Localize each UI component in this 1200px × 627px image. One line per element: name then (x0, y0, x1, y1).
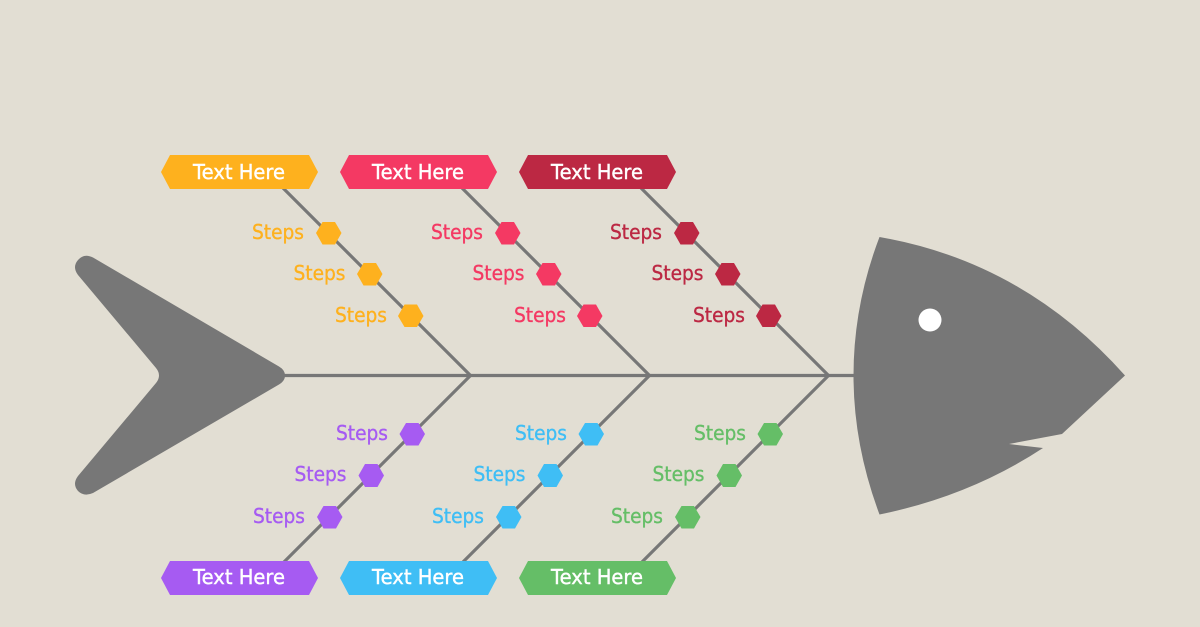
step 2 (474, 462, 563, 487)
step 3 (693, 303, 782, 327)
banner: orange (161, 155, 318, 189)
step 1: Steps (336, 421, 388, 445)
step 2 (652, 261, 740, 286)
branch: blue (340, 421, 604, 595)
step 1 (431, 220, 520, 244)
step 1: Steps (694, 421, 746, 445)
step 2: Steps (652, 462, 704, 486)
step 1: Steps (515, 421, 567, 445)
step 3 (253, 504, 342, 528)
fish head (854, 237, 1125, 514)
step 1 (694, 421, 783, 446)
banner: purple (161, 561, 318, 595)
step 2: Steps (652, 261, 704, 285)
step 1 (336, 421, 425, 446)
step 3 (514, 303, 602, 327)
step 3: Steps (432, 504, 484, 528)
banner: crimson (519, 155, 676, 189)
branch: crimson (519, 155, 782, 327)
step 3: Steps (693, 303, 745, 327)
branch: green (519, 421, 783, 595)
branch: orange (161, 155, 424, 327)
step 1 (610, 220, 700, 244)
step 2: Steps (474, 462, 526, 486)
fish tail (75, 256, 285, 495)
step 2 (294, 261, 382, 286)
banner: green (519, 561, 676, 595)
fish eye (918, 308, 942, 332)
step 1: Steps (610, 220, 662, 244)
banner: purple: Text Here (192, 565, 285, 589)
banner: orange: Text Here (192, 160, 285, 184)
step 3: Steps (514, 303, 566, 327)
step 3: Steps (253, 504, 305, 528)
spine and bones (280, 188, 860, 562)
step 3 (335, 303, 424, 327)
branch: purple (161, 421, 425, 595)
banner: green: Text Here (550, 565, 643, 589)
step 2: Steps (472, 261, 524, 285)
step 2 (652, 462, 742, 487)
step 2 (472, 261, 562, 286)
step 1 (515, 421, 604, 446)
step 2: Steps (294, 462, 346, 486)
banner: pink (340, 155, 497, 189)
step 1 (252, 220, 342, 244)
step 2 (294, 462, 384, 487)
step 3 (611, 504, 700, 528)
step 3 (432, 504, 522, 528)
step 1: Steps (431, 220, 483, 244)
step 3: Steps (335, 303, 387, 327)
branch: pink (340, 155, 602, 327)
step 2: Steps (294, 261, 346, 285)
step 1: Steps (252, 220, 304, 244)
banner: pink: Text Here (371, 160, 464, 184)
banner: blue (340, 561, 497, 595)
step 3: Steps (611, 504, 663, 528)
banner: crimson: Text Here (550, 160, 643, 184)
banner: blue: Text Here (371, 565, 464, 589)
